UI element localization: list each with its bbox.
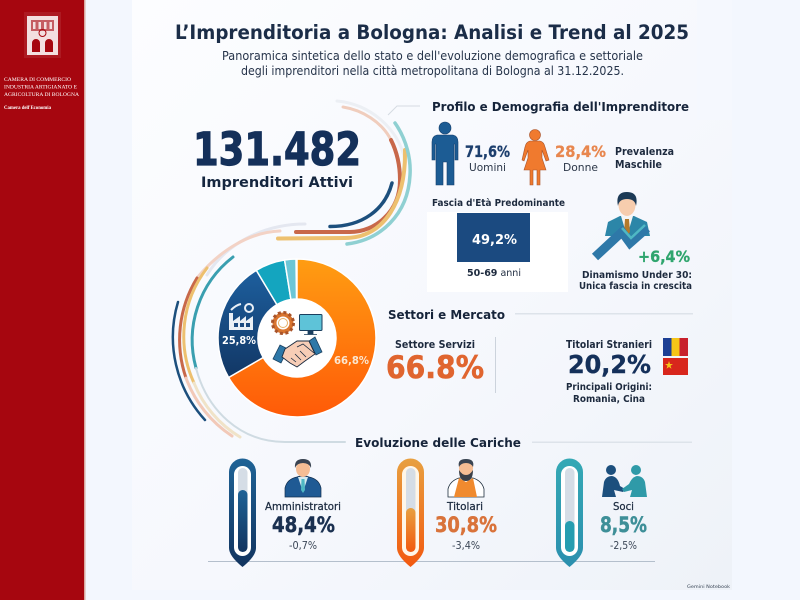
stat: Titolari Stranieri: Principali Origini: xyxy=(566,382,652,393)
text: Camera di Commercio name: INDUSTRIA ARTIGIANATO E xyxy=(4,84,78,90)
icon: monitor xyxy=(300,314,322,334)
panel: Fascia d'Età Predominante: 49,2% xyxy=(472,233,517,248)
stat: Titolari Stranieri: 20,2% xyxy=(568,350,651,379)
headline stat: 131.482: Imprenditori Attivi xyxy=(201,175,353,191)
panel: Fascia d'Età Predominante: Fascia d'Età Predominante xyxy=(432,197,565,209)
stat: women 28,4% xyxy=(555,142,606,174)
stat: Soci xyxy=(600,501,647,552)
stat: Amministratori: 48,4% xyxy=(272,513,335,537)
text: Camera dell'Economia: Camera dell'Economia xyxy=(4,106,51,111)
stat: Titolari Stranieri: Romania, Cina xyxy=(573,394,645,405)
label: 25,8%: 25,8% xyxy=(222,335,256,347)
text: Prevalenza Maschile: Prevalenza xyxy=(615,146,674,158)
icon: young person with rising arrow xyxy=(595,192,650,257)
icon: administrator xyxy=(285,459,321,497)
panel: Fascia d'Età Predominante: 50-69 anni xyxy=(467,268,521,279)
stat: Titolari: 30,8% xyxy=(435,513,497,537)
text: Prevalenza Maschile xyxy=(615,146,674,171)
heading: Profilo e Demografia: Profilo e Demografia dell'Imprenditore xyxy=(432,99,689,114)
stat: Settore Servizi: Settore Servizi xyxy=(395,339,475,351)
stat: Settore Servizi: 66.8% xyxy=(386,350,484,386)
title: L’Imprenditoria a Bologna: Analisi e Trend al 2025 xyxy=(175,21,689,44)
donut chart: settori xyxy=(218,259,376,417)
stat: under 30 +6,4%: +6,4% xyxy=(638,247,690,266)
text: Prevalenza Maschile: Maschile xyxy=(615,159,662,171)
gauge: Soci xyxy=(556,458,583,567)
headline stat: 131.482 xyxy=(193,123,361,191)
panel: Evoluzione delle Cariche xyxy=(208,435,692,567)
heading: Evoluzione delle Cariche: Evoluzione delle Cariche xyxy=(355,435,521,450)
label: 66,8%: 66,8% xyxy=(334,355,369,367)
icon: woman xyxy=(522,130,549,185)
icon: flag of Romania xyxy=(663,338,688,356)
stat: men 71,6%: Uomini xyxy=(469,161,506,174)
stat: Titolari Stranieri xyxy=(566,339,652,405)
stat: Titolari Stranieri: Titolari Stranieri xyxy=(566,339,652,351)
text: Camera di Commercio name: CAMERA DI COMMERCIO xyxy=(4,77,71,83)
stat: Amministratori xyxy=(265,501,341,552)
text: Camera di Commercio name xyxy=(4,77,79,98)
stat: Soci: Soci xyxy=(613,501,634,513)
icon: flag of China xyxy=(663,358,688,375)
stat: under 30 +6,4%: Dinamismo Under 30: xyxy=(582,270,692,281)
icon: gear xyxy=(272,312,294,334)
panel: Fascia d'Età Predominante xyxy=(427,197,568,292)
subtitle xyxy=(222,49,643,78)
stat: under 30 +6,4% xyxy=(579,247,692,292)
stat: men 71,6% xyxy=(465,142,510,174)
footer credit: Gemini Notebook xyxy=(687,584,730,590)
panel: Profilo e Demografia xyxy=(388,99,692,292)
subtitle: degli imprenditori nella città metropolitana di Bologna al 31.12.2025. xyxy=(241,64,624,78)
stat: Soci: 8,5% xyxy=(600,513,647,537)
stat: Titolari xyxy=(435,501,497,552)
subtitle: Panoramica sintetica dello stato e dell'evoluzione demografica e settoriale xyxy=(222,49,643,63)
stat: women 28,4%: 28,4% xyxy=(555,142,606,161)
icon: Camera di Commercio logo xyxy=(24,12,61,58)
stat: under 30 +6,4%: Unica fascia in crescita xyxy=(579,281,692,292)
stat: Amministratori: Amministratori xyxy=(265,501,341,513)
stat: Titolari: Titolari xyxy=(446,501,483,513)
decorative ribbon arcs xyxy=(173,101,410,442)
gauge: Amministratori xyxy=(229,458,256,567)
stat: Amministratori: -0,7% xyxy=(289,540,317,552)
heading: Settori e Mercato: Settori e Mercato xyxy=(388,307,505,322)
icon: titolare xyxy=(448,459,484,497)
stat: women 28,4%: Donne xyxy=(563,161,598,174)
icon: man xyxy=(432,122,458,185)
headline stat: 131.482: 131.482 xyxy=(193,123,361,176)
stat: men 71,6%: 71,6% xyxy=(465,142,510,161)
text: Camera di Commercio name: AGRICOLTURA DI BOLOGNA xyxy=(4,92,79,98)
gauge: Titolari xyxy=(397,458,424,567)
panel: Settori e Mercato xyxy=(386,307,693,405)
sidebar: Camera di Commercio xyxy=(0,0,86,600)
stat: Titolari: -3,4% xyxy=(452,540,480,552)
icon: soci handshake xyxy=(602,465,647,497)
stat: Soci: -2,5% xyxy=(610,540,637,552)
icon: factory xyxy=(229,304,253,330)
icon: handshake xyxy=(273,337,322,367)
